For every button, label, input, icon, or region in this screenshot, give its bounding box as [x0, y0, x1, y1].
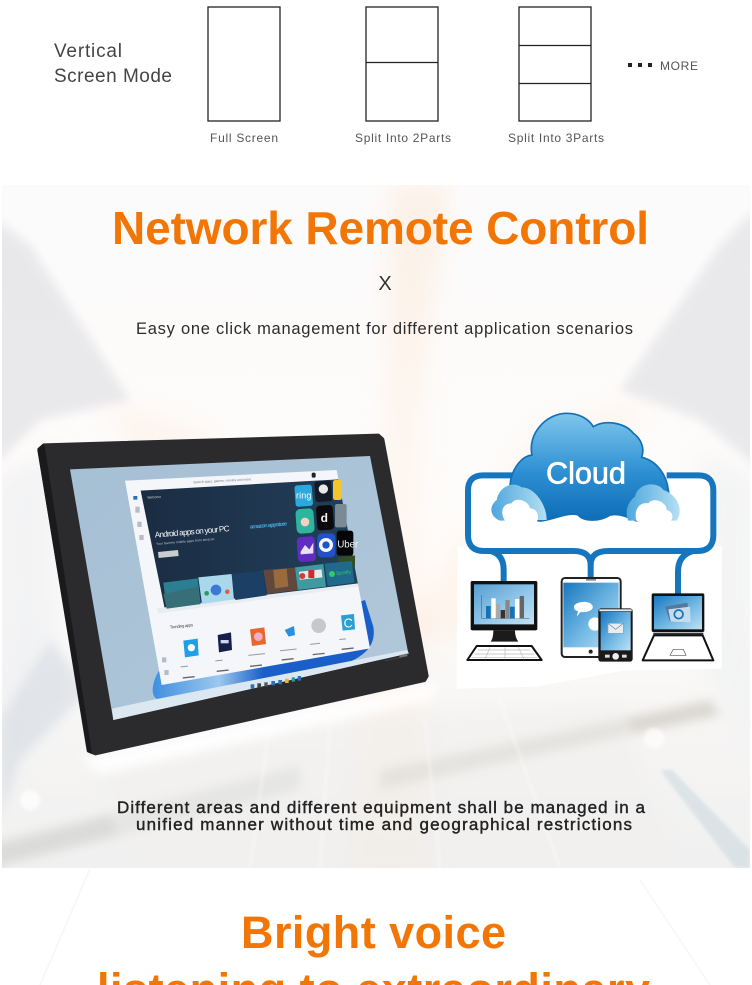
- tablet bezel: [39, 436, 427, 753]
- laptop icon: [643, 593, 713, 660]
- store window: Welcome: [147, 495, 161, 500]
- store window: Your favorite mobile apps from amazon: [156, 537, 215, 546]
- taskbar icons: [251, 676, 301, 689]
- small cloud left: [491, 485, 547, 521]
- taskbar: [112, 650, 409, 720]
- store window: amazon appstore: [250, 521, 287, 531]
- heading: vertical screen mode: Screen Mode: [54, 66, 172, 87]
- store window: [125, 470, 370, 685]
- diagram: split into 2 parts: [355, 7, 451, 145]
- small cloud right: [627, 484, 680, 522]
- diagram: split into 3 parts: [508, 7, 604, 145]
- phone device icon: [598, 608, 633, 662]
- subtitle: Easy one click management for different application scenarios: [136, 320, 633, 338]
- heading: vertical screen mode: Vertical: [54, 41, 122, 62]
- app tiles: d: [321, 511, 328, 525]
- promo cards: Spotify: [336, 569, 352, 577]
- panel: network remote control background: [0, 185, 752, 868]
- diagram: full screen: [208, 7, 280, 145]
- more label: [628, 59, 698, 73]
- title: network remote control: Network Remote Control: [112, 202, 649, 254]
- diagram: full screen: Full Screen: [210, 131, 278, 145]
- heading: vertical screen mode: [54, 41, 172, 87]
- wallpaper bloom: [153, 600, 374, 699]
- more label: MORE: [660, 59, 698, 73]
- main cloud: [510, 413, 669, 521]
- caption: unified management: unified manner without time and geographical restrictions: [136, 815, 632, 834]
- white backing panel: [457, 547, 722, 689]
- title: bright voice: Bright voice: [241, 907, 506, 958]
- panel: bright voice background: [0, 869, 750, 985]
- app tiles: Uber: [337, 539, 359, 550]
- connector lines: [468, 475, 713, 594]
- hero headline: Android apps on your PC: [154, 524, 230, 540]
- app tiles: ring: [296, 491, 311, 501]
- desktop computer: [467, 581, 542, 660]
- app tiles: [294, 480, 359, 567]
- cloud label: Cloud: [546, 456, 626, 490]
- diagram: split into 3 parts: Split Into 3Parts: [508, 131, 604, 145]
- trending apps: Trending apps: [170, 622, 193, 630]
- window top bar text: Search apps, games, movies and more: [193, 477, 251, 484]
- caption: unified management: Different areas and different equipment shall be managed in a: [117, 798, 646, 817]
- tablet screen wallpaper: [70, 456, 408, 720]
- caption: unified management: [117, 798, 646, 834]
- divider mark: X: X: [378, 273, 392, 295]
- system tray: [385, 654, 408, 661]
- tablet device: [37, 436, 427, 754]
- sidebar icons: [133, 496, 169, 675]
- section: vertical screen mode: [54, 7, 698, 145]
- tablet device icon: [562, 578, 621, 657]
- promo cards: [163, 561, 354, 609]
- cloud network diagram: [457, 413, 722, 689]
- diagram: split into 2 parts: Split Into 2Parts: [355, 131, 451, 145]
- trending apps: [170, 614, 355, 679]
- trending apps: C: [344, 616, 353, 630]
